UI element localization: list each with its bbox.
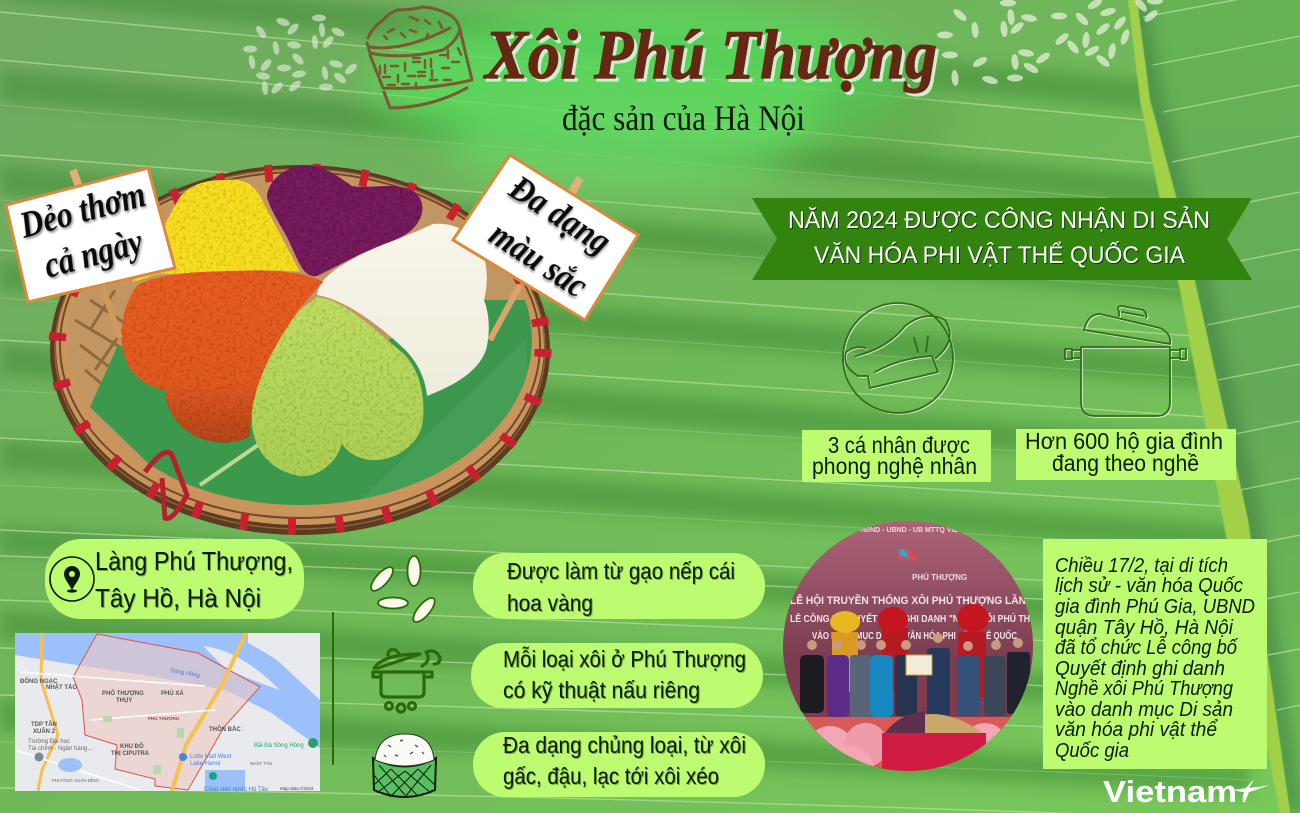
map labels: Sông Hồng xyxy=(170,668,200,679)
lion dancers xyxy=(830,604,989,697)
text block: ceremony description: Chiều 17/2, tại di tích xyxy=(1055,554,1228,577)
text block: ceremony description: lịch sử - văn hóa Quốc xyxy=(1055,574,1244,597)
text block: ceremony description: quận Tây Hồ, Hà Nội xyxy=(1055,616,1234,639)
banner: national intangible heritage: VĂN HÓA PHI VẬT THỂ QUỐC GIA xyxy=(814,241,1185,269)
bamboo weave xyxy=(74,289,123,384)
map labels: THÔN BẮC xyxy=(209,725,241,733)
map labels: PHÚ XÁ xyxy=(161,690,184,697)
stat: households: Hơn 600 hộ gia đình xyxy=(1025,428,1223,454)
right half of leaf past the midrib xyxy=(1120,0,1300,813)
info pill: varieties xyxy=(473,732,765,797)
location pill: Tây Hồ, Hà Nội xyxy=(95,583,261,613)
info pill: cooking technique xyxy=(471,643,763,708)
map labels: PHỐ THƯỢNG xyxy=(102,690,144,697)
icon: rice grains xyxy=(368,556,438,625)
text block: ceremony description: gia đình Phú Gia, UBND xyxy=(1055,595,1255,618)
text block: ceremony description: Nghề xôi Phú Thượng xyxy=(1055,677,1234,700)
decorative rice grains right xyxy=(937,0,1163,86)
icon: sticky rice basket xyxy=(373,734,436,797)
ward boundary xyxy=(73,634,260,790)
yellow rice xyxy=(132,180,300,282)
location pill xyxy=(45,539,304,619)
text block: ceremony description: đã tổ chức Lễ công bố xyxy=(1055,636,1238,659)
map labels: Lotte Mall West xyxy=(190,754,232,760)
map labels: Map data ©2024 xyxy=(280,785,314,791)
icon: chef hat xyxy=(843,303,954,414)
map labels: Bãi Đá Sông Hồng xyxy=(254,743,304,749)
illustration: rice basket with heart-shaped sticky rice xyxy=(50,165,550,535)
logo: Vietnam+: Vietnam xyxy=(1103,774,1237,809)
text block: ceremony description: Quyết định ghi danh xyxy=(1055,657,1225,680)
text block: ceremony description: Quốc gia xyxy=(1055,739,1129,762)
map of Phú Thượng ward xyxy=(15,633,320,793)
green rice xyxy=(252,297,423,476)
decorative rice grains left xyxy=(243,14,359,95)
subtitle: đặc sản của Hà Nội xyxy=(562,98,805,138)
map labels: Lake Hanoi xyxy=(190,761,220,767)
info pill: glutinous rice xyxy=(473,553,765,619)
info pill: cooking technique: có kỹ thuật nấu riêng xyxy=(503,677,700,703)
sign: Đa dạng màu sắc xyxy=(453,155,638,340)
photo: award ceremony xyxy=(783,521,1033,771)
rice cake table xyxy=(882,711,986,775)
info pill: cooking technique: Mỗi loại xôi ở Phú Thượng xyxy=(503,646,746,672)
photo: award ceremony: PHÚ THƯỢNG xyxy=(912,573,967,582)
stat: households xyxy=(1016,428,1236,480)
dignitaries xyxy=(800,633,1030,717)
map labels xyxy=(20,668,314,793)
info pill: glutinous rice: Được làm từ gạo nếp cái xyxy=(507,558,735,584)
icon: sticky rice steamer xyxy=(367,7,472,108)
orange rice xyxy=(122,271,323,443)
map labels: KHU ĐÔ xyxy=(120,742,144,750)
text block: ceremony description: vào danh mục Di sản xyxy=(1055,698,1233,721)
map labels: Trường Đại học xyxy=(28,739,70,745)
map labels: Tài chính - Ngân hàng... xyxy=(28,746,93,752)
basket xyxy=(50,165,550,535)
map labels: XUÂN 2 xyxy=(33,728,56,735)
icon: map pin xyxy=(50,557,94,601)
banner: national intangible heritage: NĂM 2024 ĐƯỢC CÔNG NHẬN DI SẢN xyxy=(788,205,1210,234)
info pill: varieties: gấc, đậu, lạc tới xôi xéo xyxy=(503,763,719,789)
icon: boiling pot xyxy=(373,650,440,712)
purple rice xyxy=(267,165,422,276)
map labels: PHƯỜNG XUÂN ĐỈNH xyxy=(52,777,99,783)
sign: Dẻo thơm cả ngày xyxy=(6,168,175,338)
banana leaf lining xyxy=(90,300,540,515)
banner: national intangible heritage xyxy=(752,198,1252,280)
red tassel xyxy=(145,452,187,519)
watercolor splash behind title xyxy=(370,2,950,195)
map labels: ĐÔNG NGẠC xyxy=(20,677,58,685)
lakes and parks xyxy=(58,758,82,772)
stat: artisans: phong nghệ nhân xyxy=(812,453,977,479)
river xyxy=(15,633,320,748)
stat: households: đang theo nghề xyxy=(1052,450,1199,476)
map labels: NHẬT TẢO xyxy=(46,684,77,691)
photo: award ceremony: LỄ CÔNG BỐ QUYẾT ĐỊNH GHI DANH "NGHỀ XÔI PHÚ TH xyxy=(790,611,1030,625)
map labels: Công viên nước Hồ Tây xyxy=(204,787,268,793)
info pill: varieties: Đa dạng chủng loại, từ xôi xyxy=(503,732,746,758)
midrib xyxy=(1128,0,1290,813)
white rice xyxy=(317,224,489,396)
text block: ceremony description: văn hóa phi vật thể xyxy=(1055,718,1218,741)
sign: Đa dạng màu sắc: màu sắc xyxy=(483,213,595,306)
sign: Dẻo thơm cả ngày: cả ngày xyxy=(40,221,147,287)
map labels: NHẬT TÂN xyxy=(250,760,272,766)
stage floor xyxy=(805,717,1011,771)
sign: Đa dạng màu sắc: Đa dạng xyxy=(502,167,618,262)
stat: artisans xyxy=(802,430,991,482)
map labels: THỤY xyxy=(116,698,132,704)
sign: Dẻo thơm cả ngày: Dẻo thơm xyxy=(15,174,150,247)
photo: award ceremony: VÀO DANH MỤC DI SẢN VĂN HÓA PHI VẬT THỂ QUỐC xyxy=(812,628,1017,642)
photo: award ceremony: HĐND - UBND - UB MTTQ VIỆT NAM xyxy=(860,525,980,534)
location pill: Làng Phú Thượng, xyxy=(95,546,293,576)
map labels: TDP TÂN xyxy=(31,721,57,728)
divider line xyxy=(332,612,334,765)
icon: cooking pot xyxy=(1065,306,1186,416)
stat: artisans: 3 cá nhân được xyxy=(828,432,970,458)
text block: ceremony description xyxy=(1043,539,1267,769)
roads xyxy=(172,633,246,791)
title: Xôi Phú Thượng xyxy=(483,17,937,94)
map labels: THỊ CIPUTRA xyxy=(111,751,150,757)
photo: award ceremony: LỄ HỘI TRUYỀN THỐNG XÔI PHÚ THƯỢNG LẦN xyxy=(790,593,1026,607)
map labels: PHÚ THƯỢNG xyxy=(148,715,180,721)
info pill: glutinous rice: hoa vàng xyxy=(507,590,593,616)
title: Xôi Phú Thượng xyxy=(486,20,940,97)
